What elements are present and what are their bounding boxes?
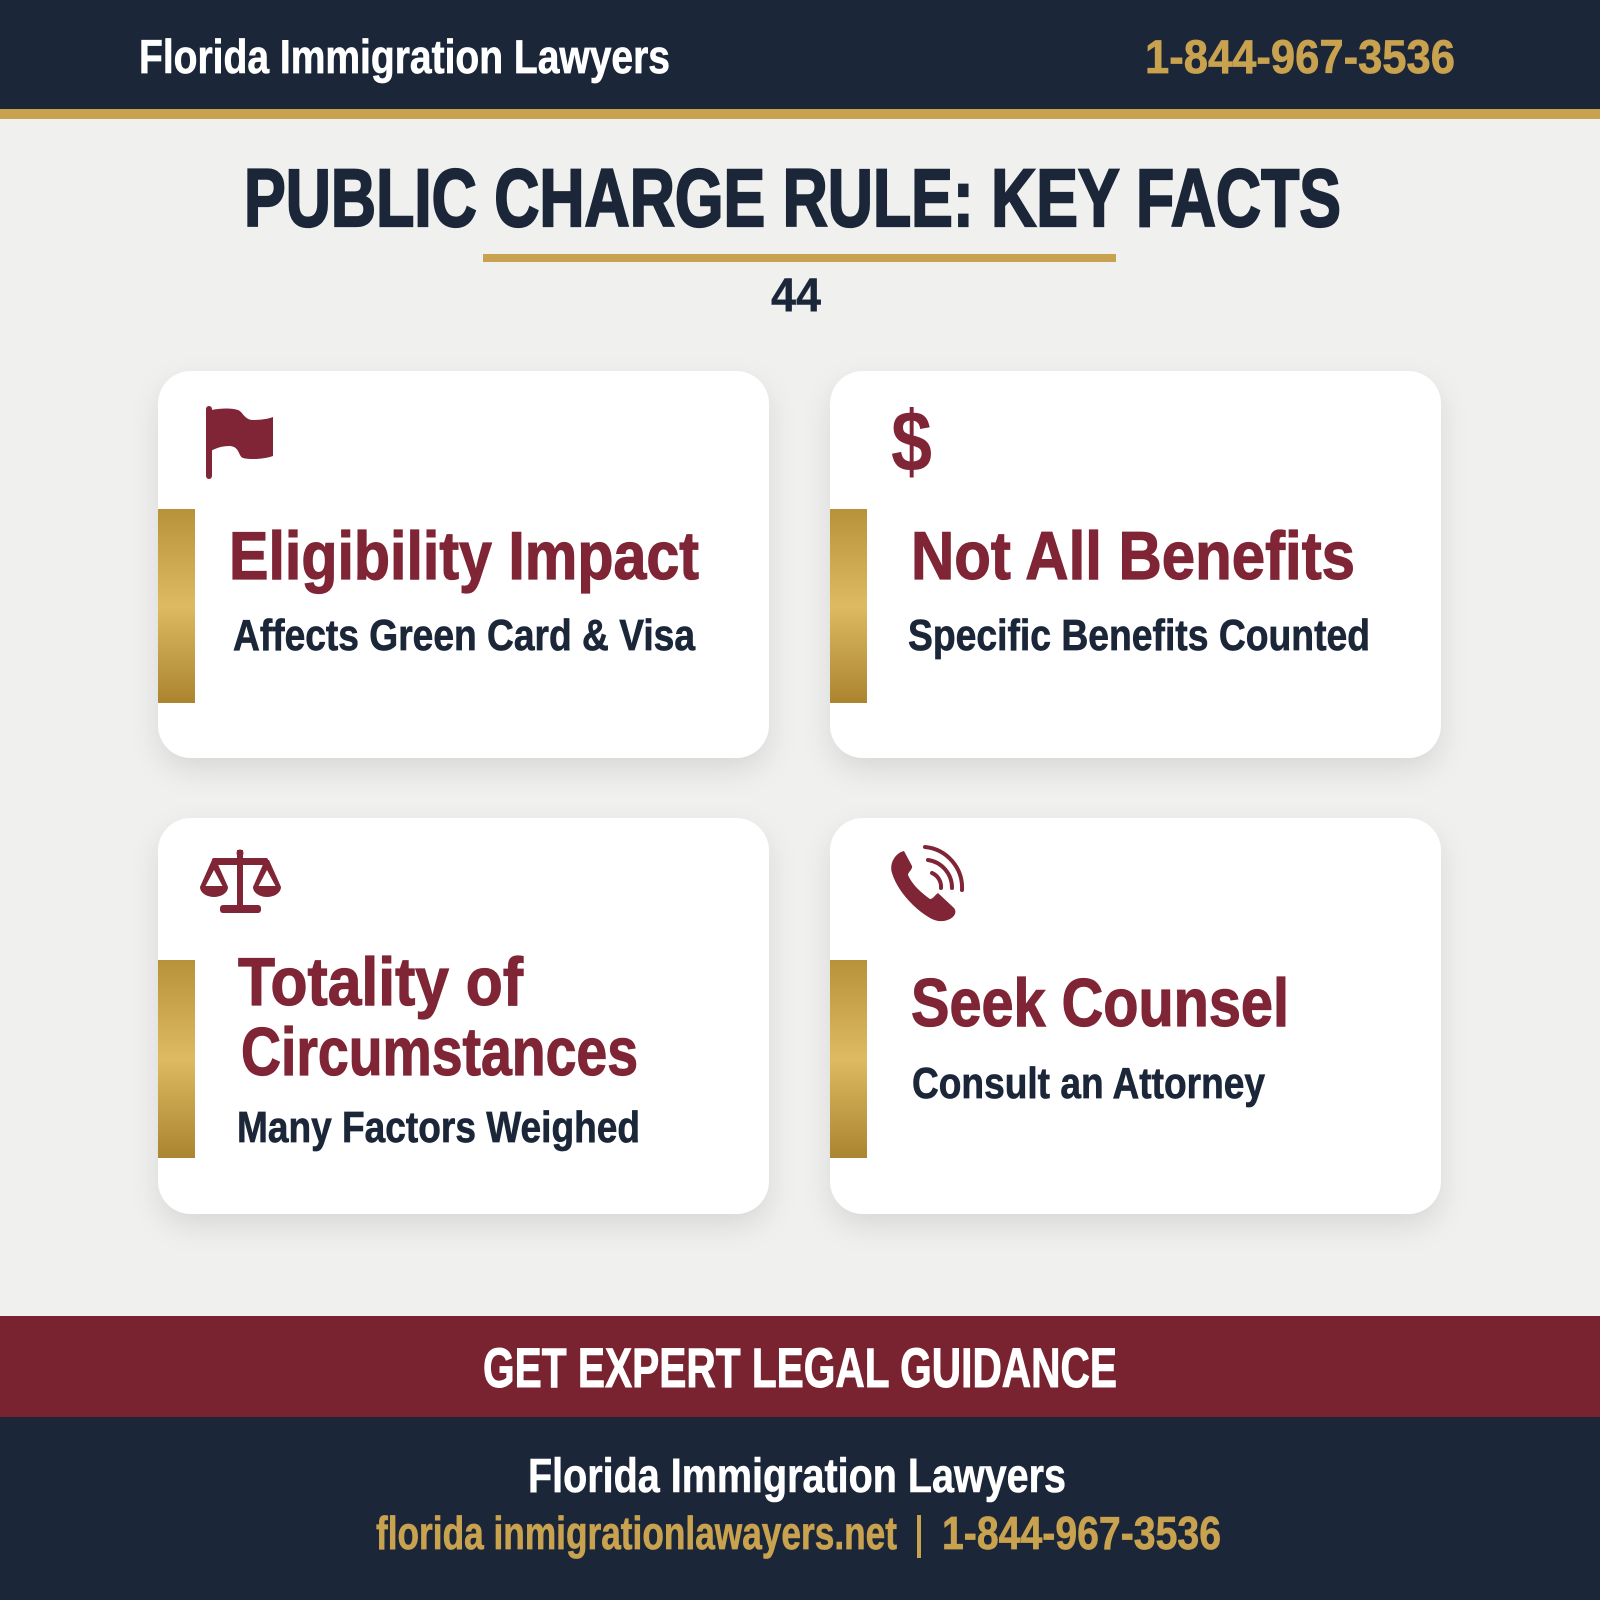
icon: flag <box>206 406 273 479</box>
text: affects green card and visa: Affects Green Card & Visa <box>233 611 695 660</box>
header bar <box>0 0 1600 119</box>
footer separator <box>917 1515 921 1558</box>
icon: dollar sign: $ <box>891 394 932 490</box>
text: consult an attorney: Consult an Attorney <box>912 1059 1265 1108</box>
panel: seek counsel <box>830 818 1441 1214</box>
heading: totality of circumstances: Circumstances <box>241 1014 638 1090</box>
footer <box>0 1417 1600 1600</box>
subtitle number: 44 <box>771 268 821 321</box>
heading: totality of circumstances <box>238 944 638 1090</box>
icon: scales of justice <box>200 850 281 913</box>
footer firm name: Florida Immigration Lawyers <box>528 1450 1066 1503</box>
call to action text: GET EXPERT LEGAL GUIDANCE <box>483 1336 1117 1399</box>
icon: phone with signal waves <box>891 847 962 921</box>
call to action banner <box>0 1316 1600 1417</box>
heading: totality of circumstances: Totality of <box>238 944 523 1020</box>
heading: eligibility impact: Eligibility Impact <box>229 518 699 594</box>
text: many factors weighed: Many Factors Weighed <box>237 1103 640 1152</box>
panel: not all benefits <box>830 371 1441 758</box>
heading: not all benefits: Not All Benefits <box>911 518 1355 594</box>
footer website: florida inmigrationlawayers.net <box>376 1507 897 1559</box>
header firm name: Florida Immigration Lawyers <box>139 30 670 83</box>
panel: eligibility impact <box>158 371 769 758</box>
panel: totality of circumstances <box>158 818 769 1214</box>
heading: seek counsel: Seek Counsel <box>911 965 1289 1041</box>
footer phone number: 1-844-967-3536 <box>942 1507 1221 1559</box>
text: specific benefits counted: Specific Benefits Counted <box>908 611 1370 660</box>
header phone number: 1-844-967-3536 <box>1145 30 1455 83</box>
